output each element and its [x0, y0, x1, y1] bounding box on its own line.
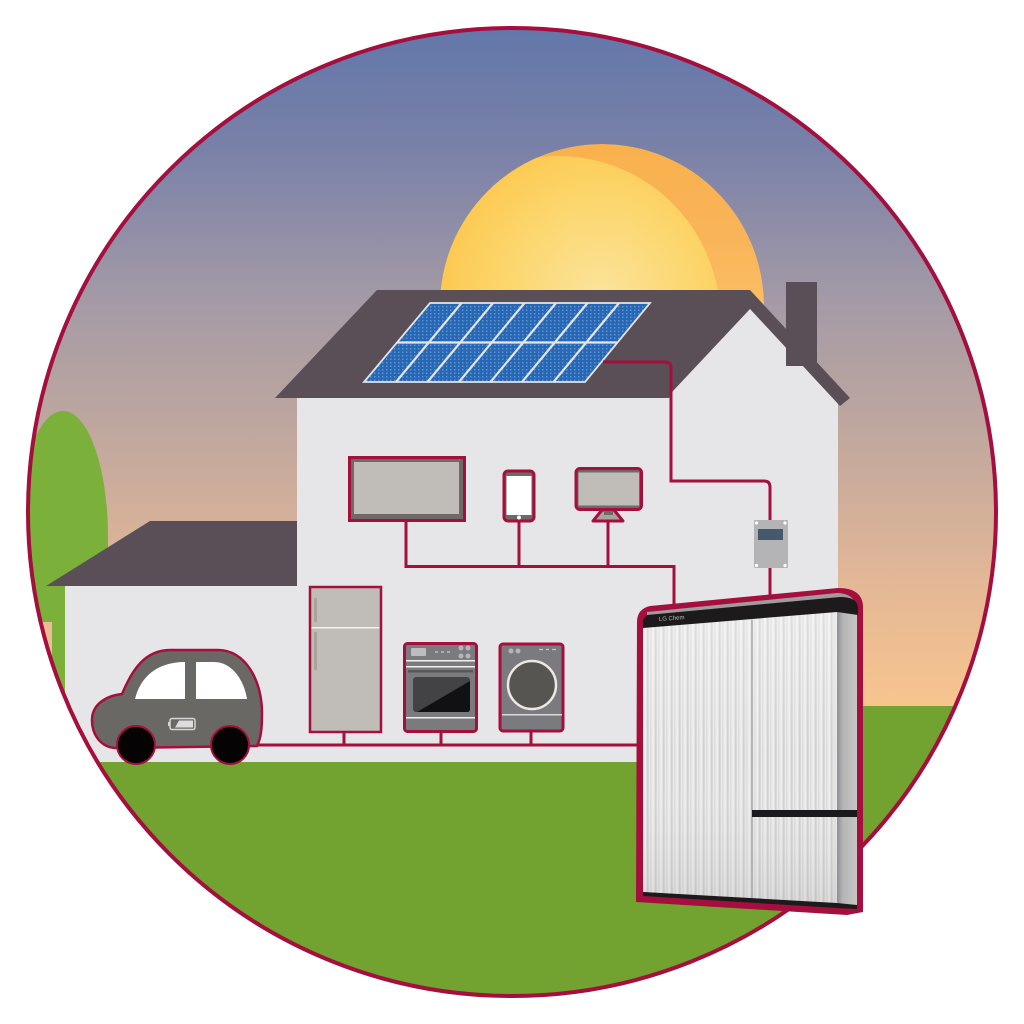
battery black band [643, 597, 858, 628]
wiring: solar panel to meter [603, 362, 770, 600]
garage roof [46, 521, 297, 586]
chimney [786, 282, 817, 366]
garage wall [65, 586, 300, 762]
icon: electric car [92, 650, 262, 764]
battery divider band [752, 810, 857, 817]
car battery symbol [168, 718, 195, 730]
tree [30, 411, 108, 692]
battery front shading [643, 610, 837, 905]
wiring: appliances [255, 732, 642, 745]
main roof [275, 290, 850, 406]
lawn [100, 706, 954, 994]
battery logo: LG Chem [659, 615, 685, 623]
icon: refrigerator [310, 587, 381, 732]
icon: smartphone [504, 471, 534, 521]
car wheel: front [211, 726, 249, 764]
icon: computer monitor [576, 468, 642, 521]
wiring: devices [406, 522, 674, 604]
icon: electricity meter [754, 520, 788, 568]
icon: oven [404, 644, 476, 732]
battery front panel [643, 610, 837, 905]
battery side panel [837, 610, 857, 908]
house wall [297, 307, 838, 762]
solar panel array [364, 303, 650, 382]
battery red outline [636, 588, 863, 915]
car wheel: rear [117, 726, 155, 764]
battery seam [751, 620, 753, 899]
sky [20, 20, 1004, 720]
battery top cap [647, 593, 855, 617]
battery bottom strip [643, 892, 857, 909]
sun [440, 144, 764, 305]
icon: wall display [350, 458, 464, 520]
icon: washing machine [500, 644, 563, 731]
LG Chem home battery [636, 588, 863, 915]
